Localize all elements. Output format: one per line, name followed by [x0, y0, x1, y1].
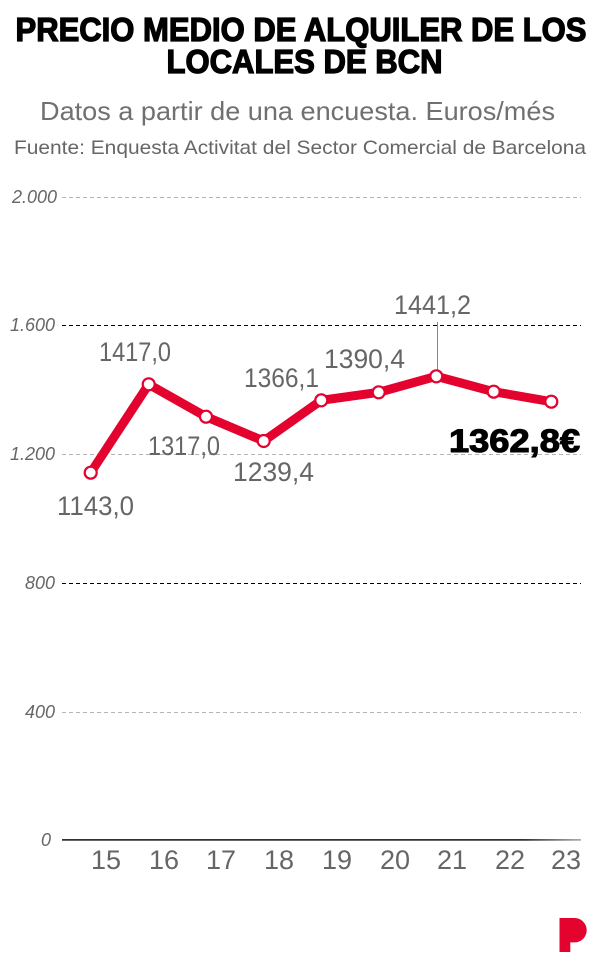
y axis labels: 800 [25, 573, 55, 593]
x axis labels: 19 [322, 845, 352, 875]
title: LOCALES DE BCN [166, 43, 442, 80]
y axis labels: 0 [41, 830, 51, 850]
y axis labels: 400 [25, 702, 55, 722]
logo [560, 918, 587, 952]
x axis labels: 17 [206, 845, 236, 875]
x axis labels [91, 845, 581, 875]
y axis labels: 1.200 [10, 444, 55, 464]
data labels: 1417,0 [99, 337, 171, 367]
data labels: 1390,4 [324, 344, 405, 374]
zero axis line [62, 839, 581, 841]
data labels: 1239,4 [233, 457, 314, 487]
title [16, 11, 586, 80]
x axis labels: 21 [437, 845, 467, 875]
y axis grid [62, 198, 581, 712]
y axis labels: 2.000 [11, 187, 57, 207]
final value callout: 1362,8€ [449, 423, 580, 459]
x axis labels: 15 [91, 845, 121, 875]
y axis labels [10, 187, 57, 850]
x axis labels: 20 [380, 845, 410, 875]
data labels: 1366,1 [244, 363, 319, 393]
data labels [57, 290, 471, 521]
source: Fuente: Enquesta Activitat del Sector Comercial de Barcelona [14, 137, 586, 159]
x axis labels: 23 [551, 845, 581, 875]
x axis labels: 18 [264, 845, 294, 875]
annotation leader line [436, 322, 438, 376]
y axis labels: 1.600 [10, 315, 55, 335]
subtitle: Datos a partir de una encuesta. Euros/més [40, 96, 555, 126]
x axis labels: 16 [149, 845, 179, 875]
data line [91, 376, 551, 473]
data labels: 1441,2 [394, 290, 471, 320]
data labels: 1317,0 [148, 431, 220, 461]
data labels: 1143,0 [57, 491, 134, 521]
data markers [85, 370, 557, 479]
x axis labels: 22 [495, 845, 525, 875]
